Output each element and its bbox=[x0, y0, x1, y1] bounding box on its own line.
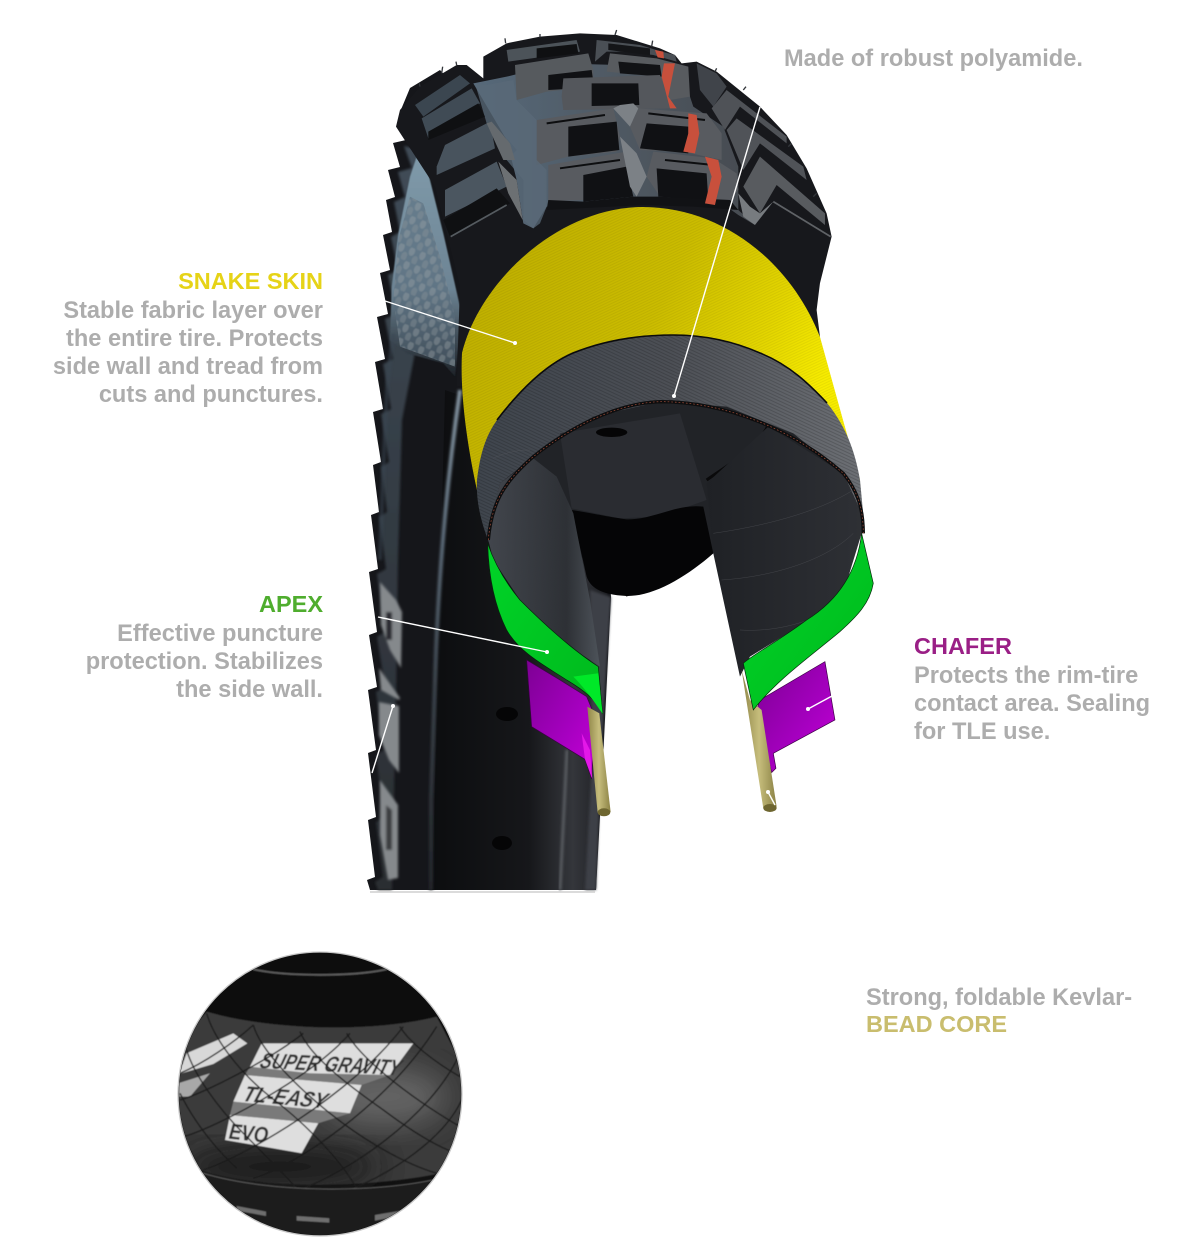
sidewall shoulder knobs bbox=[375, 146, 425, 890]
tread bbox=[396, 30, 832, 387]
valve hole bbox=[596, 428, 627, 437]
callout: apex: Effective puncture bbox=[117, 621, 323, 647]
callout: snake skin: the entire tire. Protects bbox=[66, 326, 323, 352]
tread block front rows bbox=[537, 108, 738, 210]
tread base bbox=[396, 33, 832, 387]
interior crease shadow bbox=[707, 425, 768, 480]
callout: chafer: contact area. Sealing bbox=[914, 691, 1150, 717]
right tread blocks bbox=[697, 63, 831, 237]
callout: snake skin: cuts and punctures. bbox=[99, 382, 323, 408]
callout: snake skin: Stable fabric layer over bbox=[63, 298, 323, 324]
circle white stripe bbox=[179, 1033, 247, 1074]
callout: snake skin: SNAKE SKIN bbox=[178, 268, 323, 294]
callout: snake skin: side wall and tread from bbox=[53, 354, 323, 380]
red tread stripe bbox=[655, 50, 722, 205]
interior center panel bbox=[560, 413, 707, 518]
bead core right bbox=[742, 670, 777, 812]
label SUPER GRAVITY: SUPER GRAVITY bbox=[257, 1048, 406, 1080]
bead core left bbox=[587, 707, 611, 816]
callout: apex bbox=[86, 591, 323, 703]
circle grey casing bbox=[173, 1012, 467, 1185]
circle casing light glow bbox=[320, 1067, 447, 1127]
tire interior bbox=[488, 402, 873, 816]
callout: apex: the side wall. bbox=[176, 677, 323, 703]
circle top dark rim bbox=[252, 968, 447, 1034]
callout: bead core: BEAD CORE bbox=[866, 1011, 1007, 1037]
polyamide casing band bbox=[477, 335, 865, 545]
tread spikes bbox=[419, 30, 817, 197]
label TL-EASY: TL-EASY bbox=[240, 1082, 333, 1113]
callout: apex: APEX bbox=[259, 591, 323, 617]
label TL-EASY bbox=[233, 1075, 362, 1113]
circle tread knobs bbox=[237, 1206, 410, 1223]
tread block back rows bbox=[507, 40, 690, 110]
callout: apex: protection. Stabilizes bbox=[86, 649, 323, 675]
apex left tip highlight bbox=[573, 673, 603, 714]
chafer left bbox=[527, 660, 595, 779]
apex left bbox=[488, 543, 603, 714]
stitched rim of opening bbox=[488, 402, 863, 540]
grey label stripes bbox=[230, 1067, 390, 1123]
rim lower shine bbox=[560, 750, 567, 890]
left tread blocks bbox=[415, 75, 523, 237]
leader lines bbox=[372, 107, 832, 805]
flap seam lines bbox=[493, 450, 853, 630]
label EVO bbox=[225, 1115, 318, 1153]
rim highlight strip bbox=[431, 390, 460, 890]
rim holes bbox=[492, 707, 518, 850]
interior back wall bbox=[488, 402, 863, 597]
right inner flap bbox=[707, 427, 863, 677]
callout: snake skin bbox=[53, 268, 323, 408]
chafer right bbox=[757, 662, 835, 773]
detail circle: sidewall label close-up bbox=[170, 940, 470, 1240]
callout: bead core bbox=[866, 985, 1132, 1037]
circle tire base bbox=[203, 1172, 432, 1235]
callout: chafer: Protects the rim-tire bbox=[914, 663, 1138, 689]
center tread band bbox=[473, 63, 755, 228]
circle casing lower shadow bbox=[180, 1147, 380, 1187]
apex right bbox=[743, 533, 873, 710]
callout: bead core: Strong, foldable Kevlar- bbox=[866, 985, 1132, 1011]
sidewall blue patch bbox=[380, 157, 463, 560]
tire cutaway illustration bbox=[177, 30, 874, 1237]
callout: chafer bbox=[914, 633, 1150, 745]
left inner flap bbox=[488, 458, 600, 667]
tire body silhouette bbox=[367, 70, 611, 890]
diamond net pattern bbox=[180, 1013, 462, 1188]
callout: chafer: CHAFER bbox=[914, 633, 1012, 659]
sidewall lettering bbox=[379, 582, 402, 880]
snake skin layer bbox=[462, 207, 860, 490]
tread side lumps bbox=[475, 80, 547, 228]
label EVO: EVO bbox=[228, 1119, 270, 1148]
chafer left highlight bbox=[582, 733, 592, 779]
callout: chafer: for TLE use. bbox=[914, 719, 1050, 745]
interior shadow blob bbox=[572, 506, 713, 596]
callout: polyamide: Made of robust polyamide. bbox=[784, 46, 1083, 72]
bottom edge line bbox=[370, 891, 595, 893]
label SUPER GRAVITY bbox=[250, 1043, 413, 1080]
rim well bbox=[432, 390, 608, 890]
back sidewall right edge bbox=[585, 590, 611, 890]
